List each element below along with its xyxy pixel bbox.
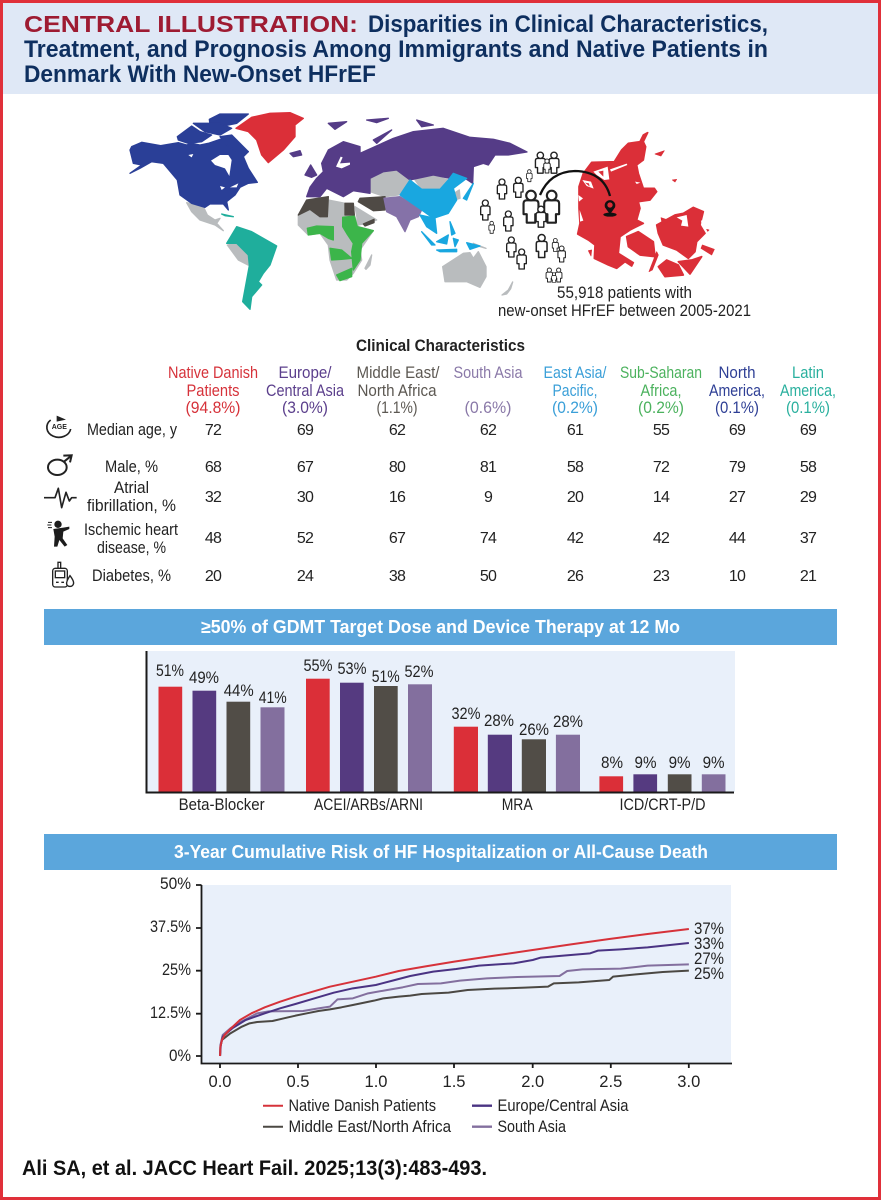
x axis labels: 0.5 (286, 1072, 310, 1091)
row: median age values: 61 (567, 422, 584, 439)
Funen (627, 232, 655, 257)
banner: 3-year risk (44, 834, 837, 870)
bar value labels: 9% (634, 753, 656, 772)
column: Middle East (356, 363, 440, 417)
smaller islands (588, 151, 714, 272)
row: ischemic heart disease values: 67 (389, 530, 406, 547)
row: male values: 58 (800, 459, 817, 476)
x axis labels: 2.5 (599, 1072, 622, 1091)
icon: age: AGE (52, 424, 67, 431)
column: Latin America (780, 363, 836, 417)
column: Latin America: America, (780, 381, 836, 400)
Limfjord islets (585, 171, 603, 187)
bars: Beta-Blocker (158, 687, 284, 792)
bar value labels: 53% (338, 659, 366, 678)
row: ischemic heart disease values: 42 (567, 530, 584, 547)
table row labels: fibrillation, % (87, 496, 176, 515)
line chart axes and ticks (196, 885, 732, 1068)
bar value labels: 55% (304, 656, 332, 675)
row: atrial fibrillation values: 16 (389, 489, 406, 506)
row: median age values: 69 (800, 422, 817, 439)
row: diabetes values: 21 (800, 568, 817, 585)
bar value labels: 9% (703, 753, 725, 772)
legend (263, 1096, 629, 1136)
x axis labels: 0.0 (208, 1072, 232, 1091)
legend: Europe/Central Asia (498, 1096, 629, 1115)
central family (524, 191, 559, 227)
banner: GDMT (44, 609, 837, 645)
x axis labels (208, 1072, 700, 1091)
region: Sub-Saharan Africa (307, 216, 373, 281)
row: atrial fibrillation values: 27 (729, 489, 746, 506)
region: Latin America (222, 214, 277, 309)
x axis labels: 2.0 (521, 1072, 544, 1091)
column: Europe: (3.0%) (282, 398, 328, 417)
bar value labels: 51% (372, 667, 400, 686)
column: North America: (0.1%) (715, 398, 759, 417)
column: East Asia: East Asia/ (544, 363, 607, 382)
row: median age values: 69 (729, 422, 746, 439)
row: atrial fibrillation values: 30 (297, 489, 314, 506)
curve end labels: 33% (694, 934, 724, 953)
bar value labels: 44% (224, 681, 254, 700)
row: median age values: 72 (205, 422, 222, 439)
curve: South Asia (220, 964, 689, 1056)
x axis labels: 1.0 (364, 1072, 388, 1091)
row: atrial fibrillation values: 9 (484, 489, 493, 506)
row: diabetes values (205, 568, 817, 585)
table row labels (84, 420, 178, 585)
column: Native Danish: Patients (186, 381, 240, 400)
column: Sub-Saharan (620, 363, 702, 417)
bar category labels: ACEI/ARBs/ARNI (314, 795, 423, 814)
table row labels: Ischemic heart (84, 520, 178, 539)
row: ischemic heart disease values: 52 (297, 530, 314, 547)
top family (535, 152, 559, 173)
x axis labels: 3.0 (677, 1072, 700, 1091)
region: Middle East North Africa (298, 197, 385, 226)
bar value labels: 26% (519, 720, 549, 739)
region: Europe Central Asia (290, 118, 527, 197)
banner: GDMT: ≥50% of GDMT Target Dose and Device Therapy at 12 Mo (201, 617, 680, 637)
bar value labels: 49% (189, 668, 219, 687)
table row labels: Atrial (114, 478, 149, 497)
row: male values: 58 (567, 459, 584, 476)
bar category labels: ICD/CRT-P/D (620, 795, 706, 814)
bar value labels: 8% (601, 753, 623, 772)
column: Europe: Central Asia (266, 381, 344, 400)
row: male values (205, 459, 817, 476)
row icons (44, 416, 77, 587)
curve end labels (694, 919, 724, 983)
Isefjord (677, 215, 703, 227)
patient count caption: 55,918 patients with (557, 283, 692, 302)
curves (220, 929, 689, 1056)
row: diabetes values: 23 (653, 568, 670, 585)
title line 3: Denmark With New-Onset HFrEF (24, 61, 376, 88)
legend: Middle East/North Africa (288, 1117, 451, 1136)
row: median age values: 62 (480, 422, 497, 439)
icon: ECG trace (44, 488, 77, 508)
bar chart axes (146, 651, 734, 792)
column: Native Danish: (94.8%) (186, 398, 240, 417)
arrow arc (540, 171, 610, 196)
y axis labels: 37.5% (150, 917, 191, 936)
table row labels: Male, % (105, 457, 158, 476)
y axis labels (150, 874, 191, 1065)
curve: Middle East North Africa (220, 971, 689, 1056)
table row labels: Median age, y (87, 420, 177, 439)
Jutland (578, 133, 657, 268)
row: male values: 68 (205, 459, 222, 476)
y axis labels: 50% (160, 874, 191, 893)
bar chart (146, 651, 735, 814)
row: diabetes values: 10 (729, 568, 746, 585)
bar value labels (156, 656, 725, 772)
Hudson Bay and lakes (188, 154, 238, 190)
bars: ACEI/ARBs/ARNI (306, 679, 432, 792)
bar value labels: 9% (669, 753, 691, 772)
y axis labels: 0% (169, 1046, 191, 1065)
bar category labels (179, 795, 706, 814)
column: Native Danish: Native Danish (168, 363, 258, 382)
Baltic sea (336, 157, 350, 168)
region: South Asia (384, 197, 422, 232)
row: diabetes values: 50 (480, 568, 497, 585)
row: male values: 81 (480, 459, 497, 476)
row: diabetes values: 38 (389, 568, 406, 585)
row: diabetes values: 20 (205, 568, 222, 585)
world map (130, 113, 527, 309)
region: North America (130, 114, 257, 210)
bar category labels: MRA (502, 795, 533, 814)
column: Europe: Europe/ (278, 363, 332, 382)
immigrant people group (481, 152, 617, 283)
curve end labels: 25% (694, 964, 724, 983)
title line 1: Disparities in Clinical Characteristics, (368, 11, 768, 38)
icon: age (47, 416, 71, 437)
row: atrial fibrillation values: 14 (653, 489, 670, 506)
legend: Native Danish Patients (288, 1096, 436, 1115)
Lolland and Falster (658, 257, 702, 277)
icon: glucose meter (53, 562, 74, 587)
region: rest of world grey (187, 170, 513, 295)
column: North America: North (718, 363, 756, 382)
column: Middle East: North Africa (358, 381, 437, 400)
title panel (3, 3, 878, 94)
bar value labels: 51% (156, 661, 184, 680)
row: median age values: 69 (297, 422, 314, 439)
row: atrial fibrillation values: 20 (567, 489, 584, 506)
row: ischemic heart disease values: 48 (205, 530, 222, 547)
table column headers (168, 363, 836, 417)
location pin (603, 200, 617, 217)
title line 2: Treatment, and Prognosis Among Immigrants and Native Patients in (24, 36, 768, 63)
column: Sub-Saharan: (0.2%) (638, 398, 684, 417)
clinical characteristics heading: Clinical Characteristics (356, 336, 525, 355)
patient count caption (498, 283, 751, 320)
y axis labels: 12.5% (150, 1003, 191, 1022)
icon: ischemic heart running person (47, 521, 69, 547)
bar value labels: 28% (553, 712, 583, 731)
table row labels: disease, % (97, 538, 166, 557)
column: North America (709, 363, 765, 417)
row: atrial fibrillation values: 29 (800, 489, 817, 506)
row: male values: 79 (729, 459, 746, 476)
bar value labels: 41% (259, 688, 287, 707)
citation: Ali SA, et al. JACC Heart Fail. 2025;13(3):483-493. (22, 1157, 487, 1180)
banner: 3-year risk: 3-Year Cumulative Risk of HF Hospitalization or All-Cause Death (174, 842, 708, 862)
curve end labels: 27% (694, 949, 724, 968)
curve: Native Danish (220, 929, 689, 1056)
row: ischemic heart disease values: 74 (480, 530, 497, 547)
bar category labels: Beta-Blocker (179, 795, 265, 814)
column: Middle East: Middle East/ (356, 363, 440, 382)
row: ischemic heart disease values (205, 530, 817, 547)
bars: ICD/CRT-P/D (599, 774, 726, 792)
single persons (481, 170, 565, 269)
icon: male symbol (48, 455, 72, 475)
patient count caption: new-onset HFrEF between 2005-2021 (498, 301, 751, 320)
row: median age values: 55 (653, 422, 670, 439)
title label: CENTRAL ILLUSTRATION: (24, 11, 358, 37)
row: male values: 67 (297, 459, 314, 476)
row: ischemic heart disease values: 42 (653, 530, 670, 547)
row: ischemic heart disease values: 37 (800, 530, 817, 547)
bar value labels: 28% (484, 711, 514, 730)
Limfjord and west coast inlets (578, 164, 640, 222)
row: atrial fibrillation values: 32 (205, 489, 222, 506)
row: atrial fibrillation values (205, 489, 817, 506)
column: Middle East: (1.1%) (376, 398, 418, 417)
bar value labels: 32% (452, 704, 480, 723)
row: male values: 80 (389, 459, 406, 476)
curve end labels: 37% (694, 919, 724, 938)
column: South Asia (454, 363, 523, 417)
line chart (150, 874, 732, 1136)
region: East Asia Pacific (400, 173, 480, 252)
column: Native Danish (168, 363, 258, 417)
row: median age values (205, 422, 817, 439)
column: South Asia: South Asia (454, 363, 523, 382)
column: North America: America, (709, 381, 765, 400)
column: Latin America: (0.1%) (786, 398, 830, 417)
Denmark map (578, 133, 714, 277)
column: Sub-Saharan: Africa, (640, 381, 682, 400)
y axis labels: 25% (162, 960, 191, 979)
bars: MRA (454, 727, 580, 792)
column: East Asia: Pacific, (552, 381, 598, 400)
column: Europe (266, 363, 344, 417)
row: median age values: 62 (389, 422, 406, 439)
row: male values: 72 (653, 459, 670, 476)
column: South Asia: (0.6%) (464, 398, 512, 417)
region: Greenland red (236, 113, 303, 163)
column: Latin America: Latin (792, 363, 824, 382)
bottom family (546, 268, 562, 283)
curve: Europe Central Asia (220, 943, 689, 1056)
table row labels: Diabetes, % (92, 566, 171, 585)
x axis labels: 1.5 (442, 1072, 466, 1091)
legend: South Asia (498, 1117, 566, 1136)
column: Sub-Saharan: Sub-Saharan (620, 363, 702, 382)
column: East Asia: (0.2%) (552, 398, 598, 417)
Zealand (657, 207, 705, 258)
row: diabetes values: 24 (297, 568, 314, 585)
bar value labels: 52% (404, 662, 434, 681)
column: East Asia (544, 363, 607, 417)
row: diabetes values: 26 (567, 568, 584, 585)
row: ischemic heart disease values: 44 (729, 530, 746, 547)
